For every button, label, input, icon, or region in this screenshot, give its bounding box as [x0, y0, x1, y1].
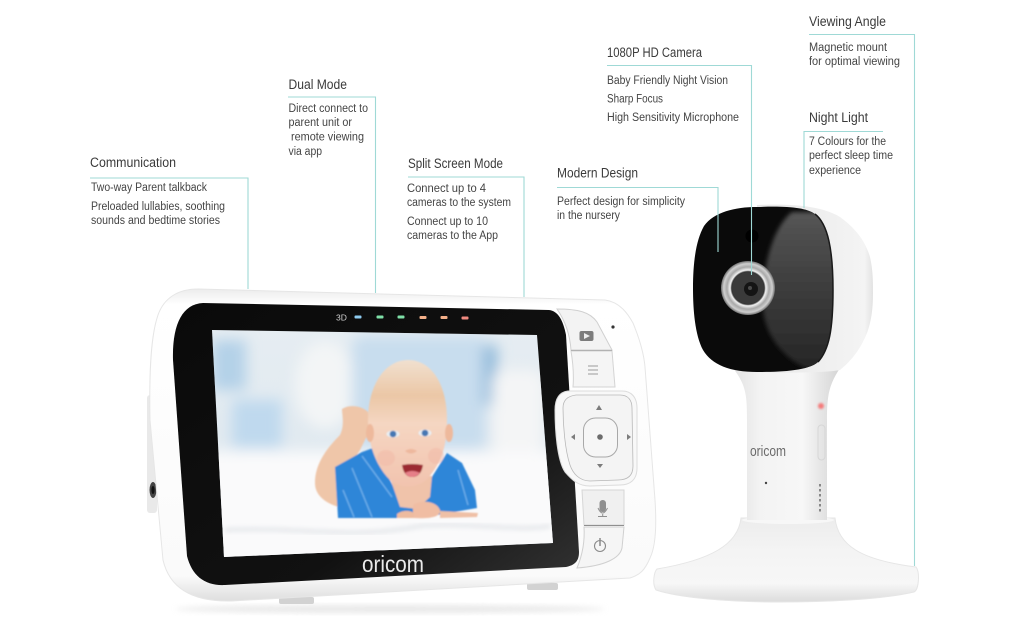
- callout: Split Screen Mode: [407, 156, 524, 297]
- text: Viewing Angle details: [809, 42, 900, 68]
- callout: Modern Design: [557, 166, 718, 252]
- text: Communication details: [91, 182, 225, 227]
- text: Night Light details: 7 Colours for the: [809, 136, 886, 148]
- text: camera details: [607, 75, 739, 124]
- heading: Modern Design: Modern Design: [557, 166, 638, 180]
- callout: Dual Mode: [288, 77, 376, 293]
- text: Split Screen Mode details: cameras to the system: [407, 197, 511, 209]
- text: Viewing Angle details: Magnetic mount: [809, 42, 888, 54]
- camera neck: [733, 368, 840, 520]
- logo: oricom on camera: oricom: [750, 443, 786, 460]
- camera head: [757, 205, 873, 373]
- callout: 1080P HD Camera: [607, 45, 752, 275]
- text: Dual Mode details: remote viewing: [291, 132, 364, 144]
- mic dot: [765, 482, 767, 484]
- monitor shadow: [175, 605, 605, 613]
- camera unit: [654, 203, 918, 602]
- text: camera details: Sharp Focus: [607, 94, 663, 106]
- text: Night Light details: [809, 136, 893, 177]
- status light: [818, 403, 824, 409]
- text: Modern Design details: Perfect design for simplicity: [557, 196, 685, 208]
- text: Dual Mode details: [288, 103, 368, 158]
- infrared sensor: [746, 230, 758, 242]
- text: Communication details: Two-way Parent talkback: [91, 182, 207, 194]
- text: Dual Mode details: via app: [288, 146, 322, 158]
- callout: Communication: [90, 155, 248, 289]
- text: Night Light details: perfect sleep time: [809, 150, 893, 162]
- bezel: [173, 303, 579, 585]
- parent monitor unit: [147, 289, 656, 604]
- text: Communication details: Preloaded lullabies, soothing: [91, 201, 225, 213]
- callout: Viewing Angle: [809, 14, 914, 566]
- heading: Communication: Communication: [90, 155, 176, 170]
- heading: Viewing Angle: Viewing Angle: [809, 14, 886, 29]
- text: Split Screen Mode details: Connect up to 10: [407, 216, 488, 228]
- logo: oricom: oricom: [362, 551, 424, 577]
- sensor dot: [611, 325, 615, 329]
- text: Dual Mode details: Direct connect to: [288, 103, 368, 115]
- text: camera details: High Sensitivity Microphone: [607, 112, 739, 124]
- button: playback: [557, 309, 612, 350]
- callout: Night Light: [804, 110, 893, 208]
- heading: Night Light: Night Light: [809, 110, 868, 125]
- side switch: [818, 425, 825, 460]
- camera base: [654, 516, 918, 602]
- heading: Split Screen Mode: Split Screen Mode: [408, 156, 503, 171]
- screen photo: [212, 330, 553, 557]
- text: Modern Design details: [557, 196, 685, 222]
- button: microphone: [582, 490, 624, 526]
- button: menu: [571, 351, 615, 387]
- text: Communication details: sounds and bedtime stories: [91, 215, 220, 227]
- speaker holes: [819, 484, 821, 513]
- text: Split Screen Mode details: [407, 183, 511, 242]
- text: Split Screen Mode details: Connect up to 4: [407, 183, 487, 195]
- side port panel: [147, 395, 157, 513]
- text: camera details: Baby Friendly Night Vision: [607, 75, 728, 87]
- lens: [721, 261, 775, 315]
- camera black face: [690, 203, 840, 375]
- text: Night Light details: experience: [809, 165, 861, 177]
- directional pad: [555, 391, 637, 486]
- text: Split Screen Mode details: cameras to the App: [407, 230, 498, 242]
- status LEDs: [336, 312, 468, 322]
- baby: [315, 360, 478, 518]
- monitor body: [150, 289, 656, 601]
- text: Viewing Angle details: for optimal viewing: [809, 56, 900, 68]
- text: Modern Design details: in the nursery: [557, 210, 620, 222]
- monitor feet: [279, 583, 558, 604]
- button: power: [577, 527, 624, 568]
- heading: 1080P HD Camera: 1080P HD Camera: [607, 45, 702, 60]
- status LEDs: 3D: [336, 312, 347, 322]
- heading: Dual Mode: Dual Mode: [288, 77, 347, 92]
- text: Dual Mode details: parent unit or: [288, 117, 352, 129]
